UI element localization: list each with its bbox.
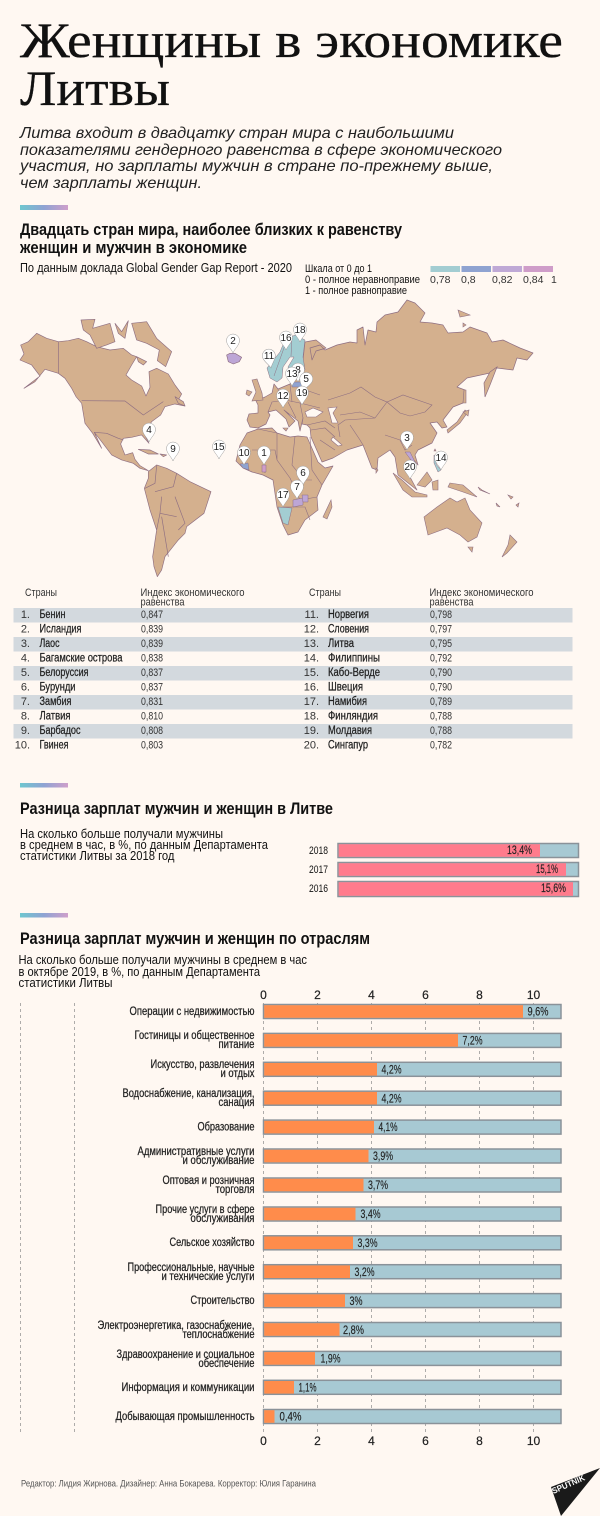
row: hospitality: питание: [218, 1039, 254, 1051]
row: education: [198, 1120, 561, 1134]
top axis: 8: [476, 988, 483, 1002]
row: hospitality: [134, 1030, 561, 1051]
row: administrative: и обслуживание: [182, 1155, 254, 1167]
row: other services: [156, 1204, 561, 1225]
table rows: left column: Лаос: [40, 638, 60, 650]
heading: twenty countries: Двадцать стран мира, наиболее близких к равенству: [20, 220, 402, 239]
table rows: left column: 6.: [21, 682, 30, 694]
row: other services: обслуживания: [190, 1213, 254, 1225]
table rows: left column: 0,837: [141, 667, 163, 679]
pin 14: 14: [435, 453, 447, 464]
row: mining: [116, 1410, 561, 1424]
row: water: 4,2%: [382, 1092, 402, 1106]
row: information: 1,1%: [298, 1380, 317, 1394]
table rows: left column: Барбадос: [40, 725, 81, 737]
table rows: right column: Норвегия: [328, 609, 369, 621]
pin 10: [238, 446, 250, 465]
sector description: в октябре 2019, в %, по данным Департамента: [18, 964, 261, 979]
top axis: [260, 988, 540, 1002]
row: energy: [98, 1320, 561, 1341]
table rows: right column: 0,795: [430, 638, 452, 650]
table rows: right column: [304, 609, 452, 752]
Asian and Pacific islands: [246, 310, 519, 557]
legend: [430, 266, 557, 286]
table rows: right column: 18.: [304, 710, 319, 722]
table rows: right column: Финляндия: [328, 710, 378, 722]
borders: [252, 384, 432, 520]
table rows: right column: Намибия: [328, 696, 367, 708]
table rows: right column: Филиппины: [328, 652, 380, 664]
table rows: left column: [15, 609, 163, 752]
title: [20, 12, 563, 116]
row: arts: Искусство, развлечения: [150, 1059, 254, 1071]
table rows: right column: 19.: [304, 725, 319, 737]
Eurasia: [247, 300, 533, 490]
bottom axis: 8: [476, 1434, 483, 1448]
bar 2016: [309, 881, 578, 896]
pin 3: [400, 431, 414, 450]
table rows: left column: 1.: [21, 609, 30, 621]
row: real estate: [130, 1004, 561, 1018]
wage gap description: в среднем в час, в %, по данным Департамента: [20, 837, 269, 852]
table rows: left column: Багамские острова: [40, 652, 123, 664]
row: other services: Прочие услуги в сфере: [156, 1204, 254, 1216]
table rows: left column: 0,837: [141, 682, 163, 694]
row: professional: Профессиональные, научные: [128, 1262, 254, 1274]
table rows: left column: 0,838: [141, 652, 163, 664]
table rows: right column: 20.: [304, 740, 319, 752]
table headers: Страны: [309, 587, 341, 599]
row: trade: [162, 1175, 561, 1196]
row: health: обеспечение: [198, 1358, 254, 1370]
table rows: left column: 4.: [21, 652, 30, 664]
pin 9: [166, 442, 180, 461]
pin 6: [296, 466, 310, 485]
row: other services: 3,4%: [360, 1207, 381, 1221]
heading: twenty countries: [19, 220, 402, 257]
title: Женщины в экономике: [20, 12, 563, 68]
pin 13: [286, 367, 298, 386]
row: hospitality: Гостиницы и общественное: [134, 1030, 254, 1042]
intro text: Литва входит в двадцатку стран мира с наибольшими: [19, 125, 454, 142]
table rows: right column: Швеция: [328, 682, 363, 694]
row: trade: 3,7%: [368, 1178, 388, 1192]
row: information: Информация и коммуникации: [122, 1382, 254, 1394]
row: hospitality: 7,2%: [462, 1034, 483, 1048]
pin 4: [142, 423, 156, 442]
pin 17: [276, 488, 290, 507]
table rows: right column: 0,797: [430, 624, 452, 636]
table rows: left column: 0,808: [141, 725, 163, 737]
table rows: left column: Гвинея: [40, 740, 68, 752]
table rows: left column: 3.: [21, 638, 30, 650]
country table: [14, 587, 572, 752]
table rows: right column: 11.: [305, 609, 319, 621]
table rows: right column: Молдавия: [328, 725, 372, 737]
row: administrative: Административные услуги: [138, 1146, 254, 1158]
logo: Sputnik: SPUTNIK: [550, 1472, 587, 1496]
pin 3: 3: [404, 433, 410, 444]
bar 2016: 2016: [309, 883, 328, 895]
pin 1: [258, 446, 270, 465]
row: health: Здравоохранение и социальное: [116, 1349, 254, 1361]
row: information: [122, 1380, 561, 1394]
intro text: показателями гендерного равенства в сфере экономического: [20, 142, 502, 159]
sector description: На сколько больше получали мужчины в среднем в час: [18, 952, 307, 967]
table rows: right column: 0,798: [430, 609, 452, 621]
table rows: right column: Литва: [328, 638, 354, 650]
row: professional: и технические услуги: [162, 1271, 254, 1283]
pin 6: 6: [300, 468, 306, 479]
intro text: чем зарплаты женщин.: [20, 175, 202, 192]
Kamchatka: [484, 367, 497, 397]
table rows: left column: Исландия: [40, 624, 82, 636]
heading: wage gap in Lithuania: Разница зарплат мужчин и женщин в Литве: [20, 799, 333, 818]
world map: [20, 300, 533, 577]
pin 11: [261, 348, 277, 369]
scale explanation: [305, 263, 420, 297]
table rows: left column: 0,831: [141, 696, 163, 708]
pin 15: 15: [213, 442, 225, 453]
wage gap description: статистики Литвы за 2018 год: [20, 848, 175, 863]
table headers: равенства: [430, 596, 474, 608]
top axis: 4: [368, 988, 375, 1002]
table rows: right column: 16.: [304, 682, 319, 694]
grid lines: [20, 1003, 534, 1432]
row: construction: 3%: [350, 1294, 363, 1308]
pin 20: [404, 460, 416, 479]
top axis: 2: [314, 988, 321, 1002]
row: professional: 3,2%: [354, 1265, 375, 1279]
table rows: left column: 0,839: [141, 638, 163, 650]
row: health: [116, 1349, 561, 1370]
legend: 0,84: [523, 274, 544, 286]
table rows: right column: 0,789: [430, 696, 452, 708]
table rows: right column: 0,782: [430, 740, 452, 752]
pin 15: [212, 440, 226, 459]
row: arts: и отдых: [220, 1068, 255, 1080]
pin 18: 18: [294, 325, 306, 336]
pin 7: [290, 480, 304, 499]
table rows: right column: Сингапур: [328, 740, 368, 752]
table headers: [25, 587, 534, 608]
source note: По данным доклада Global Gender Gap Report - 2020: [20, 260, 292, 275]
bar 2018: 2018: [309, 845, 328, 857]
scale explanation: 1 - полное равноправие: [305, 285, 407, 297]
logo: Sputnik: [550, 1468, 600, 1516]
pin 8: [292, 363, 304, 382]
section 1 accent bar: [20, 205, 68, 210]
top axis: 6: [422, 988, 429, 1002]
table rows: right column: 0,788: [430, 710, 452, 722]
table rows: left column: Латвия: [40, 710, 70, 722]
pin 13: 13: [286, 369, 298, 380]
row: construction: [190, 1294, 561, 1308]
pin 8: 8: [295, 365, 301, 376]
title: Литвы: [20, 60, 170, 116]
intro text: [19, 125, 502, 192]
pin 17: 17: [277, 490, 289, 501]
legend: 0,8: [461, 274, 476, 286]
table rows: left column: 2.: [21, 624, 30, 636]
row: energy: 2,8%: [343, 1323, 364, 1337]
table rows: left column: 0,847: [141, 609, 163, 621]
top axis: 0: [260, 988, 267, 1002]
row: energy: Электроэнергетика, газоснабжение,: [98, 1320, 254, 1332]
pin 10: 10: [238, 448, 250, 459]
top axis: 10: [527, 988, 540, 1002]
intro text: участия, но зарплаты мужчин в стране по-прежнему выше,: [19, 158, 493, 175]
row: water: санация: [218, 1097, 254, 1109]
table rows: left column: Белоруссия: [40, 667, 88, 679]
table headers: Индекс экономического: [140, 587, 244, 599]
bottom axis: [260, 1434, 540, 1448]
pin 19: 19: [296, 388, 308, 399]
legend: 0,82: [492, 274, 513, 286]
table headers: Страны: [25, 587, 57, 599]
table rows: left column: 0,839: [141, 624, 163, 636]
table rows: right column: 12.: [304, 624, 319, 636]
table rows: left column: 5.: [21, 667, 30, 679]
table rows: left column: 10.: [15, 740, 30, 752]
wage gap description: [20, 826, 269, 863]
row: arts: [150, 1059, 561, 1080]
table rows: left column: 0,810: [141, 710, 163, 722]
row: agriculture: Сельское хозяйство: [170, 1237, 254, 1249]
row: real estate: Операции с недвижимостью: [130, 1006, 255, 1018]
bar 2017: 15,1%: [536, 862, 558, 876]
bottom axis: 2: [314, 1434, 321, 1448]
row: water: [122, 1088, 561, 1109]
bar 2018: 13,4%: [507, 843, 532, 857]
table rows: right column: 0,790: [430, 682, 452, 694]
scale explanation: 0 - полное неравноправие: [305, 274, 420, 286]
pin 16: [280, 331, 292, 350]
bar 2016: 15,6%: [541, 881, 566, 895]
pin 12: [276, 389, 290, 408]
row: agriculture: [170, 1236, 561, 1250]
pin 18: [294, 323, 306, 342]
pin 1: 1: [261, 448, 267, 459]
pin 12: 12: [277, 391, 289, 402]
row: trade: Оптовая и розничная: [162, 1175, 254, 1187]
section 2 accent bar: [20, 783, 68, 788]
row: trade: торговля: [216, 1184, 254, 1196]
table rows: right column: Кабо-Верде: [328, 667, 380, 679]
bar 2017: [309, 862, 578, 876]
legend: 0,78: [430, 274, 451, 286]
pin 11: 11: [264, 351, 275, 362]
pin 16: 16: [280, 333, 292, 344]
pin 5: 5: [303, 374, 309, 385]
pin 2: 2: [230, 336, 236, 347]
table rows: right column: 17.: [304, 696, 319, 708]
row: construction: Строительство: [190, 1295, 254, 1307]
table stripes: [14, 608, 572, 738]
table headers: равенства: [140, 596, 185, 608]
bottom axis: 0: [260, 1434, 267, 1448]
table rows: right column: Словения: [328, 624, 369, 636]
table rows: right column: 0,790: [430, 667, 452, 679]
bar chart: wage gap by year: [309, 843, 578, 896]
pin 5: [297, 371, 314, 393]
bottom axis: 10: [527, 1434, 540, 1448]
table rows: left column: 9.: [21, 725, 30, 737]
table rows: left column: Бурунди: [40, 682, 76, 694]
row: mining: 0,4%: [280, 1410, 302, 1424]
scale explanation: Шкала от 0 до 1: [305, 263, 372, 275]
bottom axis: 4: [368, 1434, 375, 1448]
row: water: Водоснабжение, канализация,: [122, 1088, 254, 1100]
row: agriculture: 3,3%: [358, 1236, 378, 1250]
table rows: right column: 13.: [304, 638, 319, 650]
legend: 1: [551, 274, 557, 286]
table rows: left column: 8.: [21, 710, 30, 722]
credits: Редактор: Лидия Жирнова. Дизайнер: Анна Бокарева. Корректор: Юлия Гаранина: [21, 1478, 316, 1488]
row: energy: теплоснабжение: [182, 1329, 254, 1341]
colored countries: [240, 335, 441, 525]
pin 14: [434, 451, 448, 470]
bar 2017: 2017: [309, 864, 328, 876]
row: health: 1,9%: [320, 1352, 341, 1366]
sector description: [18, 952, 307, 990]
heading: twenty countries: женщин и мужчин в экономике: [19, 238, 247, 257]
row: arts: 4,2%: [382, 1062, 402, 1076]
table rows: right column: 15.: [304, 667, 319, 679]
table rows: right column: 0,788: [430, 725, 452, 737]
table rows: left column: 0,803: [141, 740, 163, 752]
table rows: left column: Замбия: [40, 696, 72, 708]
row: professional: [128, 1262, 561, 1283]
row: education: Образование: [198, 1122, 254, 1134]
table rows: left column: 7.: [21, 696, 30, 708]
pin 19: [296, 386, 308, 405]
pin 9: 9: [170, 444, 176, 455]
table headers: Индекс экономического: [430, 587, 534, 599]
row: administrative: 3,9%: [373, 1149, 393, 1163]
bar 2018: [309, 843, 578, 858]
row: mining: Добывающая промышленность: [116, 1411, 255, 1423]
table rows: right column: 14.: [304, 652, 319, 664]
sector description: статистики Литвы: [18, 975, 112, 990]
pin 7: 7: [294, 482, 300, 493]
pin 2: [226, 334, 240, 353]
table rows: left column: Бенин: [40, 609, 66, 621]
row: education: 4,1%: [378, 1120, 398, 1134]
Americas: [20, 319, 242, 577]
wage gap description: На сколько больше получали мужчины: [20, 826, 223, 841]
section 3 accent bar: [20, 913, 68, 918]
seas: [305, 407, 342, 446]
table rows: right column: 0,792: [430, 652, 452, 664]
bottom axis: 6: [422, 1434, 429, 1448]
map pins: [142, 323, 448, 507]
Africa: [236, 428, 333, 535]
row: real estate: 9,6%: [528, 1004, 549, 1018]
pin 4: 4: [146, 425, 152, 436]
row: administrative: [138, 1146, 561, 1167]
pin 20: 20: [404, 462, 416, 473]
heading: wage gap by sector: Разница зарплат мужчин и женщин по отраслям: [20, 929, 370, 948]
bar chart: sectors: [20, 988, 561, 1448]
